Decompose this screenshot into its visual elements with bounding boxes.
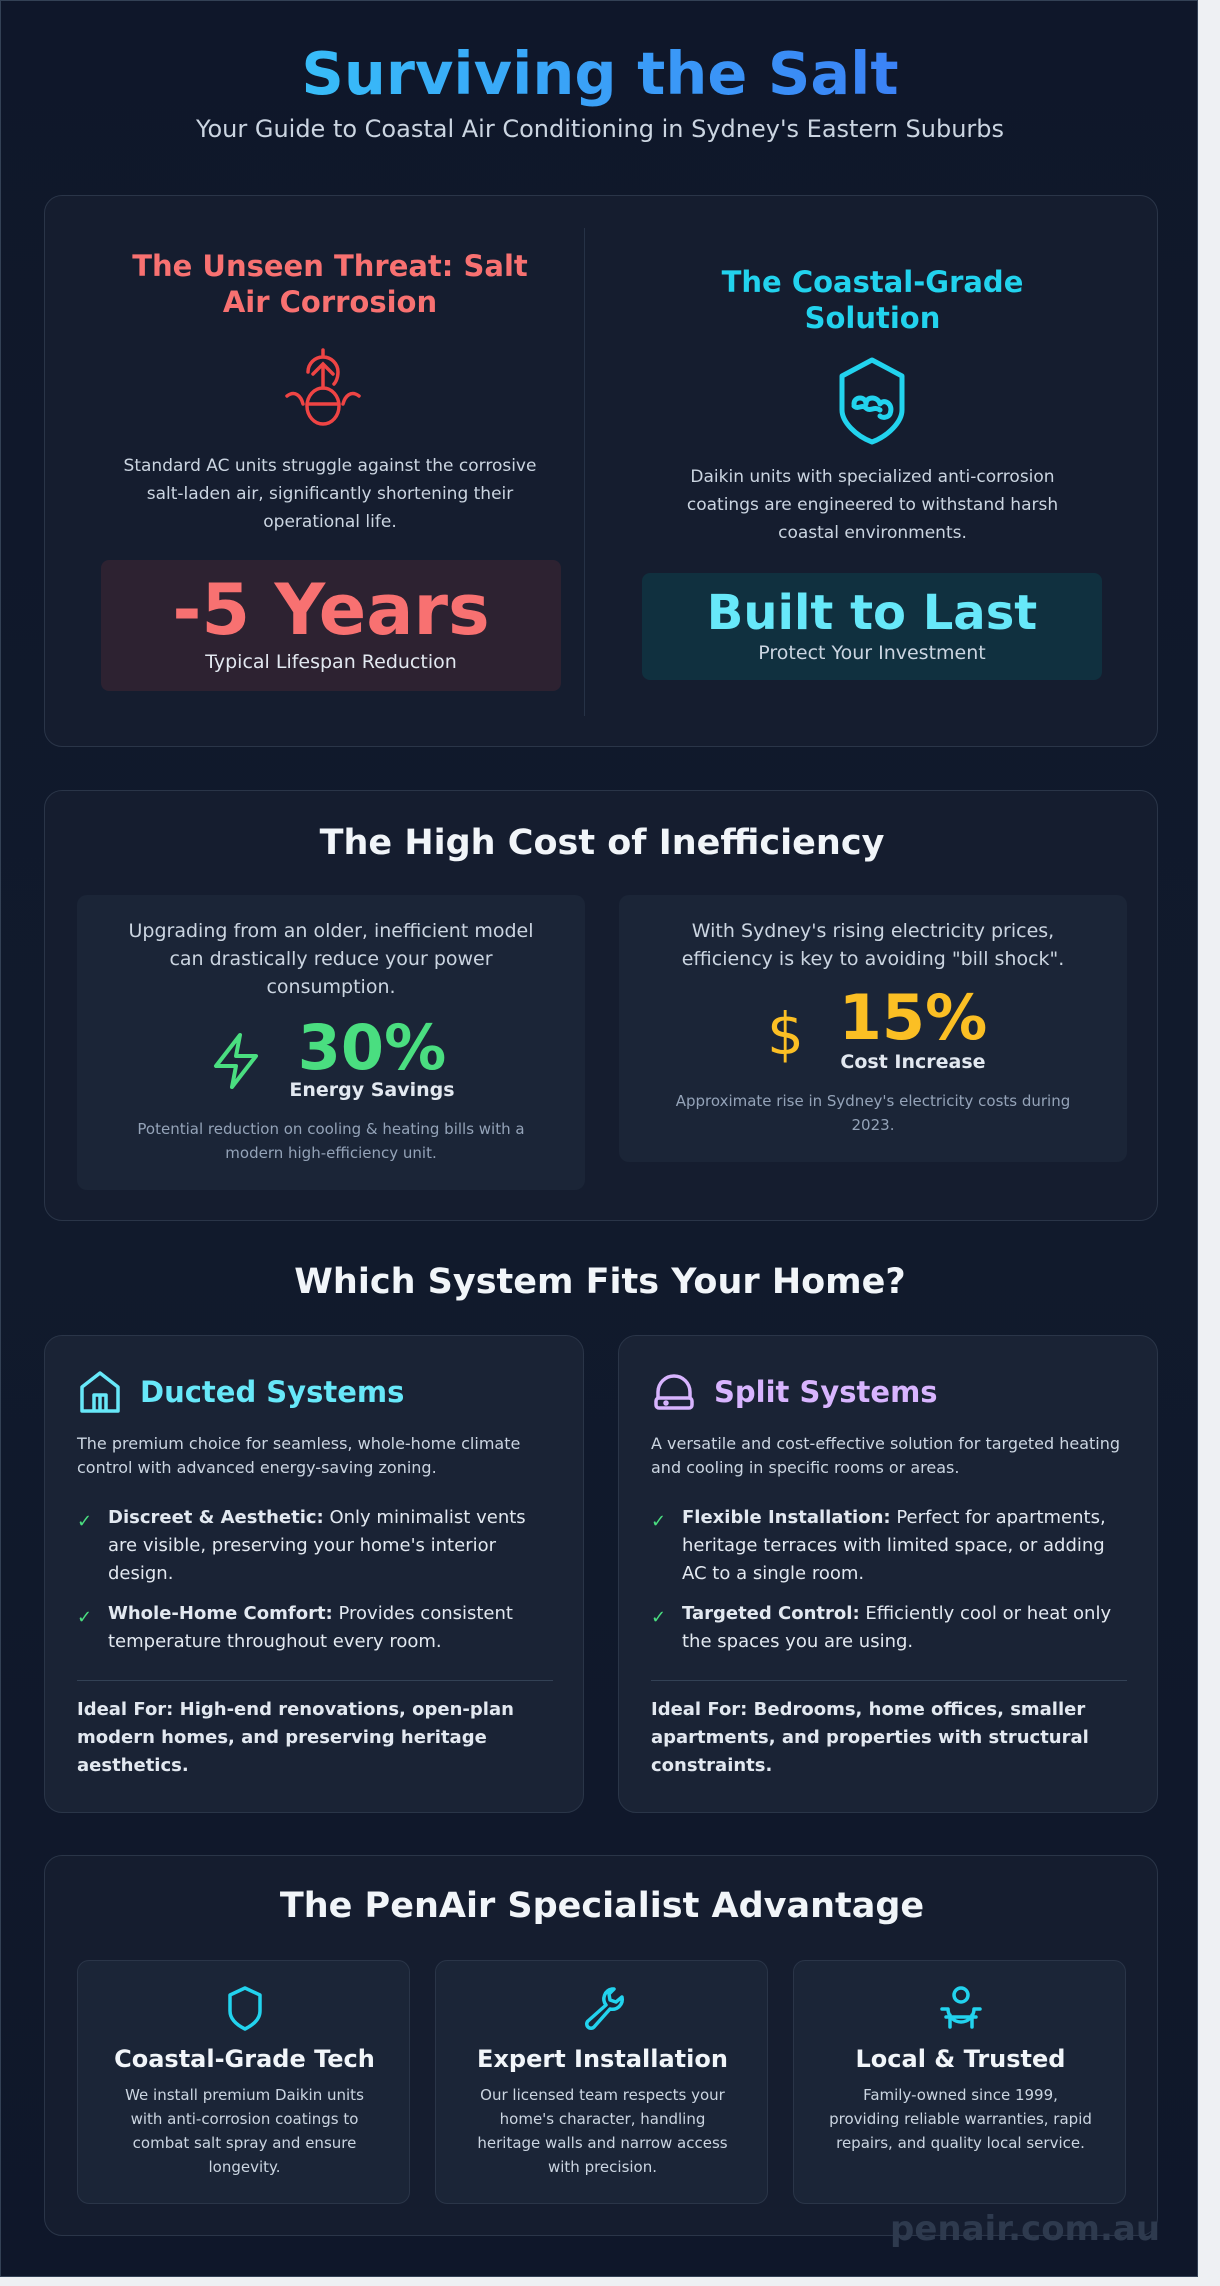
icon: bolt <box>214 1033 258 1089</box>
heading: which system: Which System Fits Your Home? <box>294 1262 906 1302</box>
card: local & trusted: providing reliable warranties, rapid repairs, and quality local service. <box>829 2110 1092 2152</box>
title: Surviving the Salt <box>301 39 899 108</box>
subtitle: Your Guide to Coastal Air Conditioning in Sydney's Eastern Suburbs <box>196 115 1004 143</box>
panel: ducted systems: Ideal For: High-end renovations, open-plan modern homes, and preserving heritage aesthetics. <box>77 1699 514 1776</box>
heading: Split Systems <box>714 1375 938 1409</box>
bullet list <box>651 1507 1111 1652</box>
bullet list: Targeted Control: Efficiently cool or heat only the spaces you are using. <box>682 1603 1111 1652</box>
icon: shield <box>228 1986 262 2031</box>
bullet list: Whole-Home Comfort: Provides consistent temperature throughout every room. <box>108 1603 513 1652</box>
panel: split systems: Ideal For: Bedrooms, home offices, smaller apartments, and properties with structural constraints. <box>651 1699 1089 1776</box>
stat 15%: 15% <box>839 981 987 1054</box>
icon: person <box>940 1986 982 2029</box>
bullet list: ✓ <box>77 1607 92 1628</box>
card: cost increase: With Sydney's rising electricity prices, efficiency is key to avoiding "bill shock". <box>682 920 1064 970</box>
heading: solution: Solution <box>805 301 940 335</box>
panel: threat vs solution <box>44 195 1158 747</box>
card: energy savings: Energy Savings <box>289 1079 455 1101</box>
icon: corrosion <box>285 348 361 426</box>
card: expert installation <box>435 1960 768 2204</box>
heading: solution <box>722 265 1023 335</box>
card: energy savings <box>77 895 585 1190</box>
card: expert installation: Expert Installation <box>477 2045 728 2073</box>
heading: threat <box>132 249 528 319</box>
icon: house <box>80 1371 120 1413</box>
stat: built to last: Built to Last <box>707 585 1037 641</box>
stat: built to last <box>642 573 1102 680</box>
panel: split systems <box>618 1335 1158 1813</box>
panel: split systems: A versatile and cost-effective solution for targeted heating and cooling in specific rooms or areas. <box>651 1434 1120 1477</box>
heading: threat: The Unseen Threat: Salt <box>132 249 528 283</box>
stat: -5 years <box>101 560 561 691</box>
card: coastal-grade tech: We install premium Daikin units with anti-corrosion coatings to combat salt spray and ensure longevity. <box>125 2086 364 2176</box>
card: cost increase: Approximate rise in Sydney's electricity costs during 2023. <box>676 1092 1070 1134</box>
bullet list: Flexible Installation: Perfect for apartments, heritage terraces with limited space, or adding AC to a single room. <box>682 1507 1106 1584</box>
icon: wrench <box>585 1987 624 2030</box>
card: coastal-grade tech <box>77 1960 410 2204</box>
card: cost increase <box>619 895 1127 1162</box>
stat: -5 years: Typical Lifespan Reduction <box>205 651 457 673</box>
bullet list: ✓ <box>77 1511 92 1532</box>
card: local & trusted <box>793 1960 1126 2204</box>
stat: built to last: Protect Your Investment <box>758 642 986 664</box>
card: coastal-grade tech: Coastal-Grade Tech <box>114 2045 375 2073</box>
card: local & trusted: Family-owned since 1999, <box>863 2086 1058 2104</box>
panel: high cost <box>44 790 1158 1221</box>
panel: ducted systems: The premium choice for seamless, whole-home climate control with advanced energy-saving zoning. <box>77 1434 520 1477</box>
bullet list: ✓ <box>651 1607 666 1628</box>
card: energy savings: Potential reduction on cooling & heating bills with a modern high-efficiency unit. <box>137 1120 525 1162</box>
icon: split unit <box>654 1374 694 1410</box>
heading: The PenAir Specialist Advantage <box>280 1886 924 1926</box>
card: energy savings: Upgrading from an older, inefficient model can drastically reduce your power consumption. <box>128 920 533 998</box>
stat 30%: 30% <box>298 1011 446 1084</box>
panel: penair advantage <box>44 1855 1158 2236</box>
text: solution: Daikin units with specialized anti-corrosion coatings are engineered to withstand harsh coastal environments. <box>687 467 1058 543</box>
heading: The High Cost of Inefficiency <box>320 823 884 863</box>
card: local & trusted: Local & Trusted <box>856 2045 1065 2073</box>
bullet list <box>77 1507 526 1652</box>
heading: Ducted Systems <box>140 1375 404 1409</box>
heading: threat: Air Corrosion <box>223 285 437 319</box>
bullet list: Discreet & Aesthetic: Only minimalist vents are visible, preserving your home's interior design. <box>108 1507 526 1584</box>
card: expert installation: Our licensed team respects your home's character, handling heritage walls and narrow access with precision. <box>477 2086 728 2176</box>
bullet list: ✓ <box>651 1511 666 1532</box>
icon: shield waves <box>840 358 904 444</box>
stat: -5 years: -5 Years <box>172 569 490 651</box>
panel: ducted systems <box>44 1335 584 1813</box>
heading: solution: The Coastal-Grade <box>722 265 1023 299</box>
card: cost increase: Cost Increase <box>840 1051 986 1073</box>
icon: dollar: $ <box>767 1000 804 1068</box>
watermark: penair.com.au <box>890 2209 1160 2249</box>
text: threat: Standard AC units struggle against the corrosive salt-laden air, significantly shortening their operational life. <box>124 456 536 532</box>
